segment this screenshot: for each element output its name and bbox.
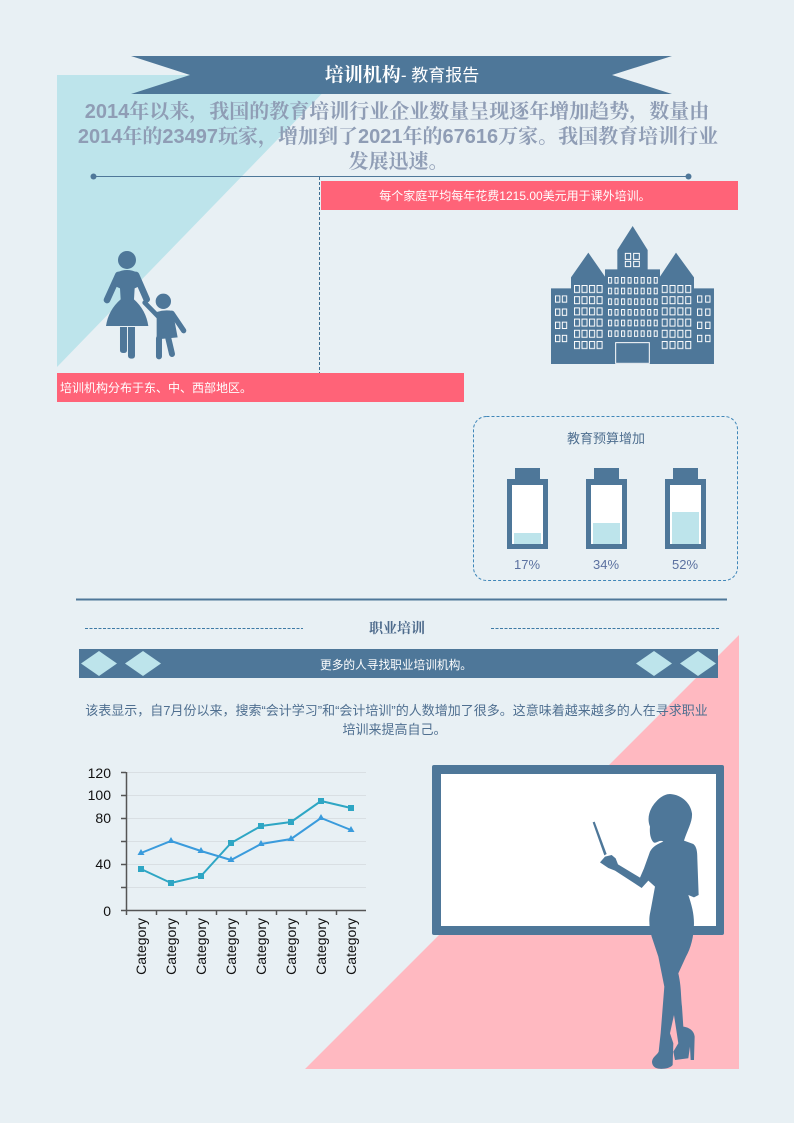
series: square markers (138, 798, 354, 886)
battery 52% (665, 468, 706, 572)
description paragraph (85, 703, 708, 737)
y axis labels: 80 (95, 810, 111, 826)
battery 34% (586, 468, 627, 572)
description paragraph: 该表显示，自7月份以来，搜索“会计学习”和“会计培训”的人数增加了很多。这意味着越来越多的人在寻求职业 (85, 703, 708, 718)
x axis labels: Category (253, 918, 269, 975)
battery 52%: 52% (672, 557, 698, 572)
callout: regional distribution: 培训机构分布于东、中、西部地区。 (60, 380, 252, 395)
icon: teacher silhouette (593, 794, 699, 1069)
chart grid lines (126, 772, 366, 888)
section divider (76, 598, 727, 600)
chart axes (121, 772, 366, 915)
y axis labels (88, 765, 111, 919)
icon: school building (551, 226, 714, 364)
x axis labels: Category (163, 918, 179, 975)
x axis labels: Category (283, 918, 299, 975)
x axis labels: Category (133, 918, 149, 975)
intro heading text (78, 99, 718, 173)
y axis labels: 100 (88, 787, 111, 803)
icon: mother and child (106, 251, 184, 359)
intro heading text: 发展迅速。 (348, 150, 448, 173)
intro heading text: 2014年以来，我国的教育培训行业企业数量呈现逐年增加趋势，数量由 (85, 99, 709, 123)
callout: household spending: 每个家庭平均每年花费1215.00美元用于课外培训。 (379, 188, 651, 203)
section heading: vocational training: 职业培训 (369, 620, 425, 637)
light blue corner triangle (57, 75, 340, 367)
x axis labels: Category (313, 918, 329, 975)
y axis labels: 40 (95, 856, 111, 872)
panel: education budget batteries (474, 416, 738, 580)
line chart (88, 765, 366, 975)
battery 17%: 17% (514, 557, 540, 572)
x axis labels (133, 918, 359, 975)
x axis labels: Category (193, 918, 209, 975)
ribbon bar with diamonds (79, 649, 718, 678)
panel heading: 教育预算增加 (567, 431, 645, 446)
ribbon bar with diamonds: 更多的人寻找职业培训机构。 (320, 658, 472, 672)
x axis labels: Category (343, 918, 359, 975)
battery 17% (507, 468, 548, 572)
description paragraph: 培训来提高自己。 (342, 722, 447, 737)
battery 34%: 34% (593, 557, 619, 572)
series: triangle markers (138, 814, 354, 862)
y axis labels: 0 (103, 903, 111, 919)
pink corner triangle (305, 635, 739, 1069)
presentation board (432, 765, 724, 935)
dashed vertical connector (318, 177, 320, 373)
callout: regional distribution (57, 373, 464, 402)
title banner: 培训机构- 教育报告 (325, 64, 479, 86)
horizontal timeline with end dots (90, 174, 692, 180)
y axis labels: 120 (88, 765, 111, 781)
callout: household spending (321, 181, 738, 210)
x axis labels: Category (223, 918, 239, 975)
intro heading text: 2014年的23497玩家，增加到了2021年的67616万家。我国教育培训行业 (78, 124, 718, 148)
title banner (131, 56, 672, 94)
